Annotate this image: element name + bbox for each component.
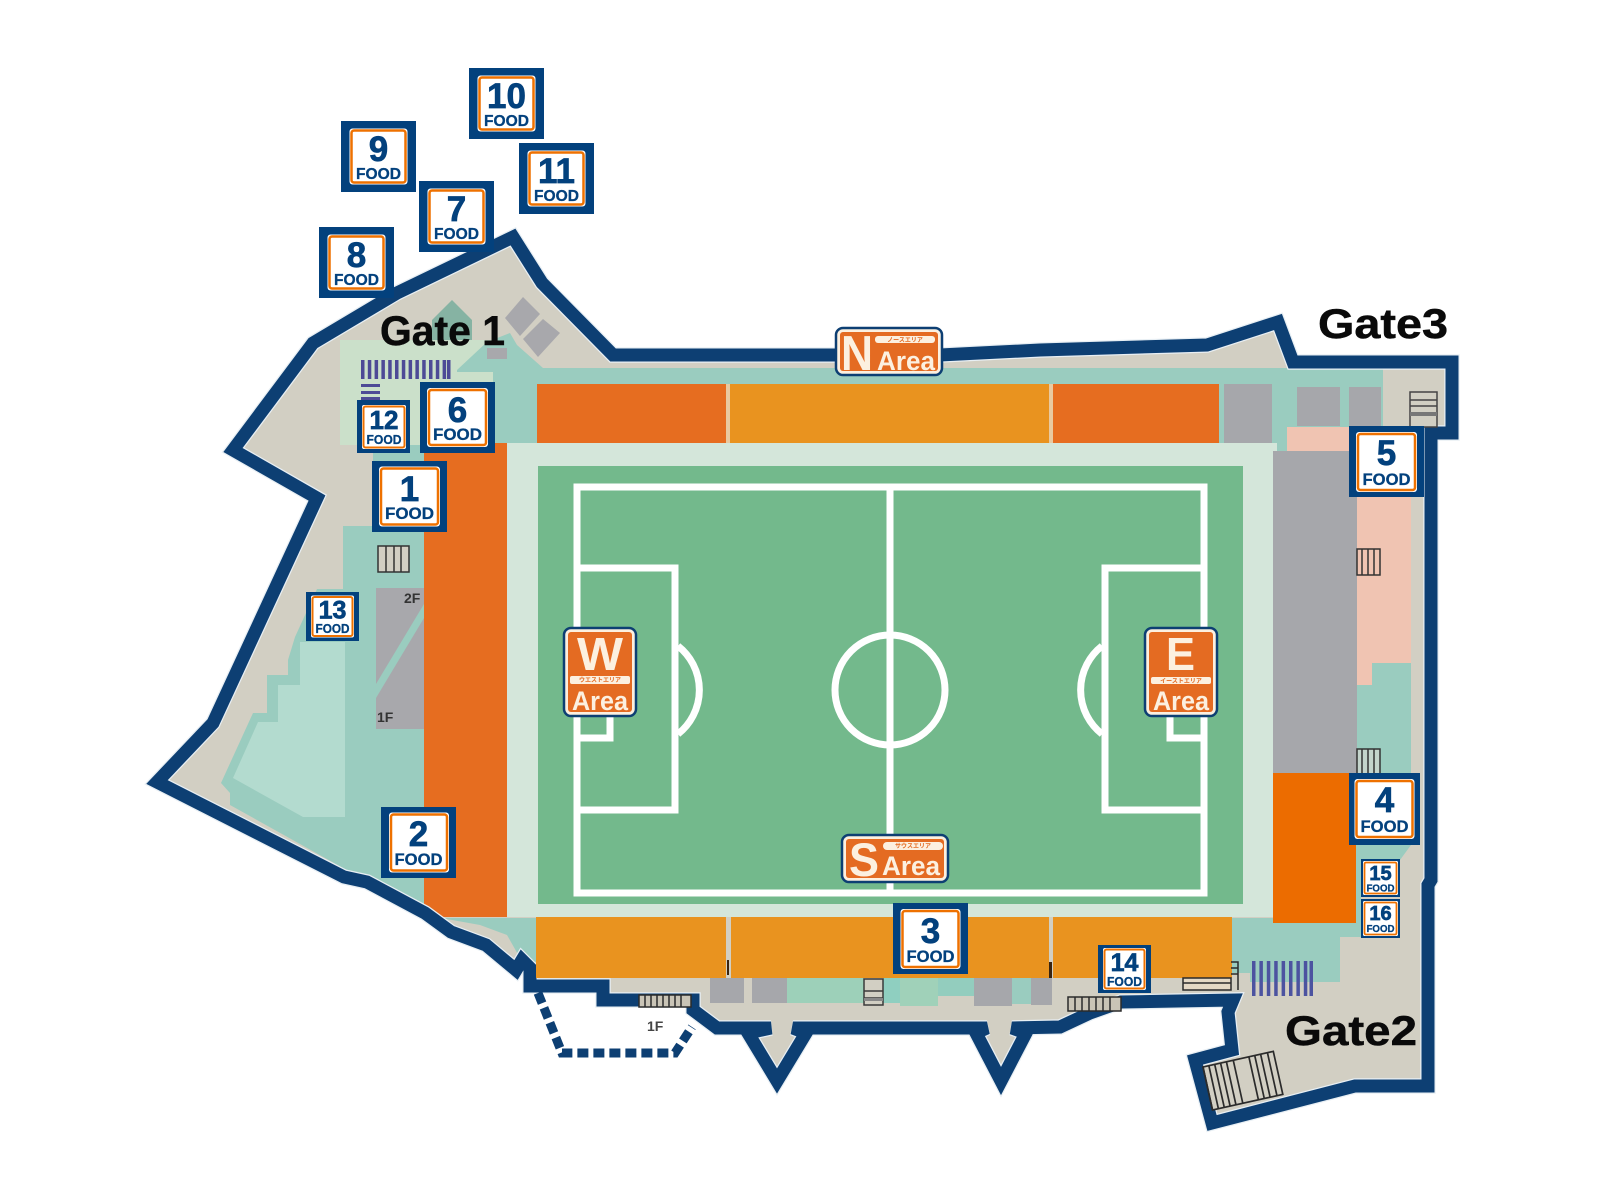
badge: FOOD 8 [319, 227, 394, 298]
badge: FOOD 14 [1098, 945, 1151, 993]
sign: W Area: Area [572, 686, 629, 716]
badge: FOOD 16 [1361, 899, 1400, 938]
badge: FOOD 7: 7 [447, 190, 466, 229]
gate 1 gray blocks [487, 297, 560, 359]
gate 1 stairs [361, 360, 450, 400]
sign: N Area: Area [877, 346, 936, 376]
heading: Gate 2: Gate2 [1285, 1007, 1417, 1054]
badge: FOOD 6 [420, 382, 495, 453]
stairs icon south east [1068, 997, 1121, 1011]
pitch surround [507, 443, 1277, 917]
badge: FOOD 16: FOOD [1366, 924, 1394, 935]
badge: FOOD 6: FOOD [433, 425, 482, 444]
sign: N Area [836, 327, 942, 381]
sign: E Area: E [1166, 628, 1195, 680]
sign: S Area: S [849, 833, 879, 886]
badge: FOOD 8: FOOD [334, 272, 379, 289]
badge: FOOD 4 [1349, 773, 1420, 845]
sign: W Area: W [577, 628, 624, 680]
stairs icon east lower [1357, 749, 1380, 774]
badge: FOOD 2 [381, 807, 456, 878]
gray ramp 1F to 2F: 2F [404, 590, 421, 606]
north gray blocks [1224, 384, 1381, 443]
badge: FOOD 11: 11 [538, 152, 575, 191]
badge: FOOD 13: FOOD [316, 622, 350, 636]
sign: N Area: N [841, 327, 873, 381]
badge: FOOD 3: FOOD [906, 947, 954, 966]
badge: FOOD 9 [341, 121, 416, 192]
heading: Gate 1: Gate 1 [380, 307, 505, 354]
badge: FOOD 2: 2 [409, 815, 428, 854]
gray ramp 1F to 2F [370, 588, 424, 729]
stairs plaza [233, 642, 345, 817]
badge: FOOD 15: FOOD [1366, 884, 1394, 894]
1F label: 1F [647, 1018, 664, 1034]
badge: FOOD 4: 4 [1375, 781, 1395, 820]
badge: FOOD 10: 10 [487, 77, 526, 116]
sign: S Area: Area [882, 851, 941, 881]
south concourse blocks [710, 978, 1052, 1006]
heading: Gate 3: Gate3 [1318, 300, 1448, 347]
badge: FOOD 13: 13 [319, 596, 346, 624]
badge: FOOD 8: 8 [347, 236, 366, 275]
sign: W Area [564, 628, 636, 716]
outer wall [157, 237, 1452, 1123]
badge: FOOD 6: 6 [448, 391, 467, 430]
gate 2 stairs [1203, 1051, 1283, 1110]
sign: E Area: Area [1153, 686, 1210, 716]
badge: FOOD 1 [372, 461, 447, 532]
badge: FOOD 14: 14 [1111, 949, 1138, 977]
football pitch [538, 466, 1243, 904]
badge: FOOD 7 [419, 181, 494, 252]
badge: FOOD 10: FOOD [484, 113, 529, 130]
badge: FOOD 4: FOOD [1360, 817, 1408, 836]
badge: FOOD 1: 1 [400, 470, 419, 509]
gate 2 purple stairs [1252, 961, 1313, 996]
badge: FOOD 3 [893, 903, 968, 974]
badge: FOOD 11 [519, 143, 594, 214]
badge: FOOD 9: 9 [369, 130, 388, 169]
west orange stand [424, 443, 507, 917]
stairs icon north east [1410, 392, 1437, 427]
east gray stand [1273, 451, 1357, 773]
sign: S Area [842, 833, 948, 886]
sign: E Area [1145, 628, 1217, 716]
badge: FOOD 12 [357, 400, 410, 453]
badge: FOOD 12: FOOD [366, 432, 402, 447]
stairs near gate 2 top [1183, 962, 1238, 990]
badge: FOOD 15 [1361, 859, 1400, 897]
badge: FOOD 13 [306, 592, 359, 641]
stairs icon west [378, 546, 409, 572]
concourse zones [221, 300, 1411, 982]
stadium ground floor [157, 237, 1452, 1123]
sign: E Area: イーストエリア [1160, 678, 1202, 685]
badge: FOOD 12: 12 [370, 405, 398, 435]
north stands [537, 384, 1219, 443]
stairs icon east upper [1357, 549, 1380, 575]
south stands [536, 917, 1232, 978]
badge: FOOD 5: 5 [1377, 434, 1396, 473]
badge: FOOD 2: FOOD [394, 850, 442, 869]
dashed first floor outline [538, 993, 692, 1053]
badge: FOOD 15: 15 [1369, 863, 1392, 885]
stairs icon south west [639, 995, 691, 1007]
badge: FOOD 10 [469, 68, 544, 139]
stairs icon south centre [864, 979, 883, 1005]
east orange stand [1273, 773, 1356, 923]
sign: W Area: ウエストエリア [579, 677, 621, 684]
badge: FOOD 7: FOOD [434, 226, 479, 243]
badge: FOOD 14: FOOD [1107, 975, 1142, 989]
badge: FOOD 16: 16 [1369, 903, 1392, 925]
gray ramp 1F to 2F: 1F [377, 709, 394, 725]
sign: S Area: サウスエリア [895, 843, 931, 850]
badge: FOOD 1: FOOD [385, 504, 434, 523]
badge: FOOD 5: FOOD [1362, 470, 1410, 489]
pink concourse [1287, 427, 1411, 685]
badge: FOOD 3: 3 [921, 912, 940, 951]
badge: FOOD 11: FOOD [534, 188, 579, 205]
badge: FOOD 5 [1349, 426, 1424, 497]
sign: N Area: ノースエリア [887, 337, 923, 344]
badge: FOOD 9: FOOD [356, 166, 401, 183]
